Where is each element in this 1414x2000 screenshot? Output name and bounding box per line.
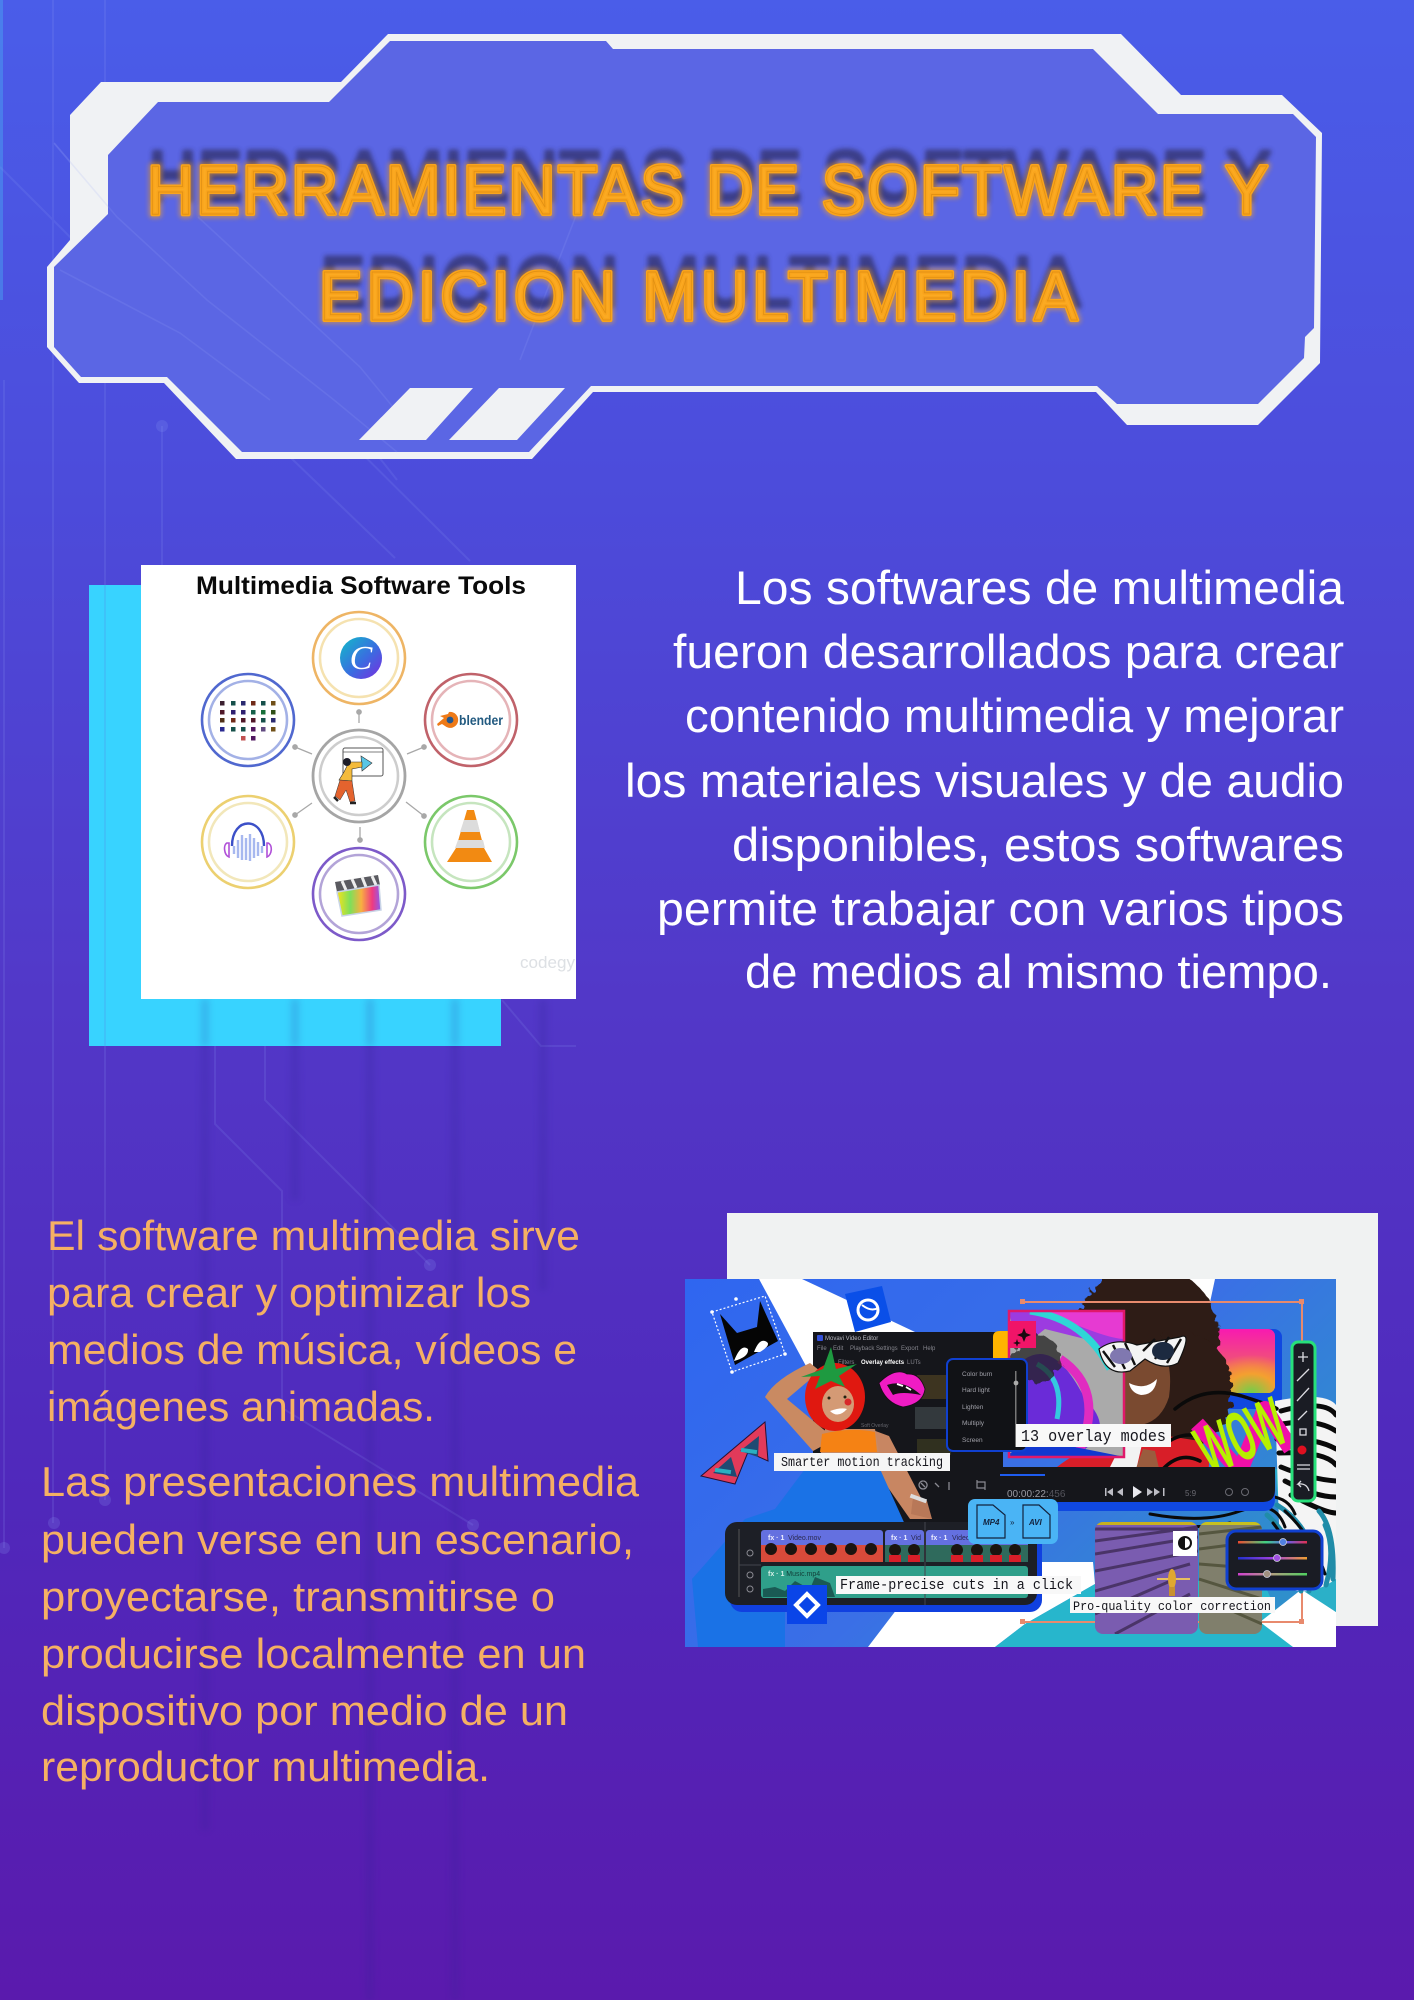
label: pro-quality color correction: Pro-quality color correction (1073, 1599, 1271, 1614)
title shadow (149, 138, 1273, 322)
text block: right paragraph: de medios al mismo tiempo. (745, 945, 1332, 998)
collage editor window: File (817, 1346, 827, 1352)
title glow: HERRAMIENTAS DE SOFTWARE Y (147, 152, 1271, 230)
collage editor window (813, 1332, 1003, 1522)
text block: first left paragraph: imágenes animadas. (47, 1383, 435, 1430)
collage editor window: Edit (833, 1346, 844, 1352)
collage timeline: Video (952, 1535, 970, 1542)
title glow: EDICION MULTIMEDIA (319, 258, 1082, 336)
title lettering: HERRAMIENTAS DE SOFTWARE Y (147, 152, 1271, 230)
collage menu popup (947, 1359, 1027, 1451)
collage player bar: 5:9 (1185, 1489, 1197, 1498)
title lettering (147, 152, 1271, 336)
title (147, 138, 1273, 336)
collage editor window: Filters (838, 1360, 854, 1366)
collage player bar (993, 1467, 1275, 1511)
text block: second left paragraph: dispositivo por medio de un (41, 1687, 568, 1734)
panel: cyan backing rectangle (89, 585, 501, 1046)
text block: first left paragraph: El software multimedia sirve (47, 1212, 580, 1259)
text block: second left paragraph: producirse localmente en un (41, 1630, 586, 1677)
icon: central person circle (313, 730, 405, 822)
title shadow: HERRAMIENTAS DE SOFTWARE Y (149, 138, 1273, 216)
icon: blender circle (425, 674, 517, 766)
collage overlay frame border (1008, 1311, 1124, 1457)
collage editor window: Overlay effects (861, 1360, 905, 1366)
collage timeline: Video.mov (788, 1535, 821, 1542)
icon: final cut clapper circle (313, 848, 405, 940)
text block: second left paragraph: pueden verse en un escenario, (41, 1516, 634, 1563)
collage menu popup: Color burn (962, 1371, 993, 1378)
icon: adobe apps circle (202, 674, 294, 766)
text block: right paragraph: disponibles, estos softwares (732, 818, 1344, 871)
collage timeline: Vid (911, 1535, 921, 1542)
panel: light backing rectangle (727, 1213, 1378, 1626)
collage tool bar (1292, 1342, 1315, 1501)
title inner neon line (147, 152, 1271, 336)
icon: canva circle: C (350, 640, 373, 677)
collage format conversion card: AVI (1028, 1518, 1043, 1527)
label: frame-precise cuts: Frame-precise cuts in a click (840, 1577, 1073, 1594)
collage sticker icon (845, 1286, 891, 1332)
title lettering: EDICION MULTIMEDIA (319, 258, 1082, 336)
text block: first left paragraph: para crear y optimizar los (47, 1269, 531, 1316)
collage colour sliders panel (1227, 1531, 1322, 1589)
collage editor window: Settings (876, 1346, 898, 1352)
text block: right paragraph: Los softwares de multimedia (735, 561, 1345, 614)
collage format conversion card: » (1010, 1518, 1015, 1527)
collage pink gradient card (993, 1329, 1282, 1409)
collage editor window: LUTs (907, 1360, 921, 1366)
title banner (47, 34, 1322, 459)
collage format conversion card (968, 1499, 1058, 1544)
banner inner panel (54, 41, 1316, 452)
collage dancer (692, 1347, 932, 1647)
text block: right paragraph (625, 561, 1345, 998)
banner faint lines (54, 143, 577, 452)
collage chain icon (787, 1585, 827, 1624)
collage editor window: Export (901, 1346, 919, 1352)
text block: right paragraph: fueron desarrollados para crear (673, 625, 1344, 678)
text block: first left paragraph (47, 1212, 580, 1430)
collage editor window: Soft Overlay (861, 1423, 889, 1429)
collage glasses (1099, 1336, 1186, 1372)
collage selection frame (1020, 1299, 1304, 1624)
collage zebra waves (1150, 1393, 1336, 1591)
text block: right paragraph: contenido multimedia y mejorar (685, 689, 1344, 742)
collage lavender photo (1095, 1522, 1262, 1634)
collage timeline (725, 1522, 1042, 1612)
collage editor window: Playback (850, 1346, 875, 1352)
collage overlay image frame (1005, 1311, 1125, 1457)
text block: second left paragraph (41, 1458, 640, 1790)
collage menu popup: Lighten (962, 1404, 984, 1411)
collage editor window: Movavi Video Editor (825, 1336, 878, 1342)
title shadow: EDICION MULTIMEDIA (321, 244, 1084, 322)
collage timeline: fx · 1 (768, 1535, 784, 1542)
text block: second left paragraph: Las presentaciones multimedia (41, 1458, 640, 1505)
text block: second left paragraph: reproductor multimedia. (41, 1743, 490, 1790)
collage background shapes (759, 1279, 1336, 1647)
collage lips sticker (879, 1372, 925, 1407)
text block: second left paragraph: proyectarse, transmitirse o (41, 1573, 555, 1620)
text block: first left paragraph: medios de música, vídeos e (47, 1326, 577, 1373)
collage timeline: fx · 1 Music.mp4 (768, 1571, 820, 1578)
label: smarter motion tracking: Smarter motion tracking (781, 1455, 943, 1471)
label: 13 overlay modes: 13 overlay modes (1021, 1428, 1166, 1447)
collage cat icon (710, 1296, 787, 1374)
banner stripes (359, 388, 565, 440)
watermark: codegy (520, 953, 575, 972)
text block: right paragraph: permite trabajar con varios tipos (657, 882, 1344, 935)
icon: blender circle: blender (459, 713, 504, 728)
collage format conversion card: MP4 (983, 1518, 1000, 1527)
collage editor window: Help (923, 1346, 936, 1352)
collage menu popup: Screen (962, 1437, 983, 1444)
title inner neon line: EDICION MULTIMEDIA (319, 258, 1082, 336)
text block: right paragraph: los materiales visuales y de audio (625, 754, 1344, 807)
collage timeline: fx · 1 (891, 1535, 907, 1542)
panel: multimedia software tools diagram (141, 565, 576, 999)
collage woman portrait (1057, 1279, 1234, 1467)
collage wow sticker: wow (1177, 1367, 1298, 1492)
collage menu popup: Hard light (962, 1387, 990, 1394)
title inner neon line: HERRAMIENTAS DE SOFTWARE Y (147, 152, 1271, 230)
collage wow sticker (1190, 1396, 1290, 1467)
collage timeline: fx · 1 (931, 1535, 947, 1542)
icon: vlc cone circle (425, 796, 517, 888)
connector lines (293, 710, 426, 842)
banner outer frame (47, 34, 1322, 459)
circuit background pattern (0, 0, 576, 2000)
icon: audio headphones circle (202, 796, 294, 888)
panel: video editor collage (685, 1265, 1336, 1647)
title glow (147, 152, 1271, 336)
icon: canva circle (313, 612, 405, 704)
collage triangle sticker (701, 1422, 768, 1484)
diagram heading: Multimedia Software Tools (196, 572, 526, 600)
collage menu popup: Multiply (962, 1420, 985, 1427)
collage player bar: 00:00:22:456 (1007, 1489, 1066, 1500)
